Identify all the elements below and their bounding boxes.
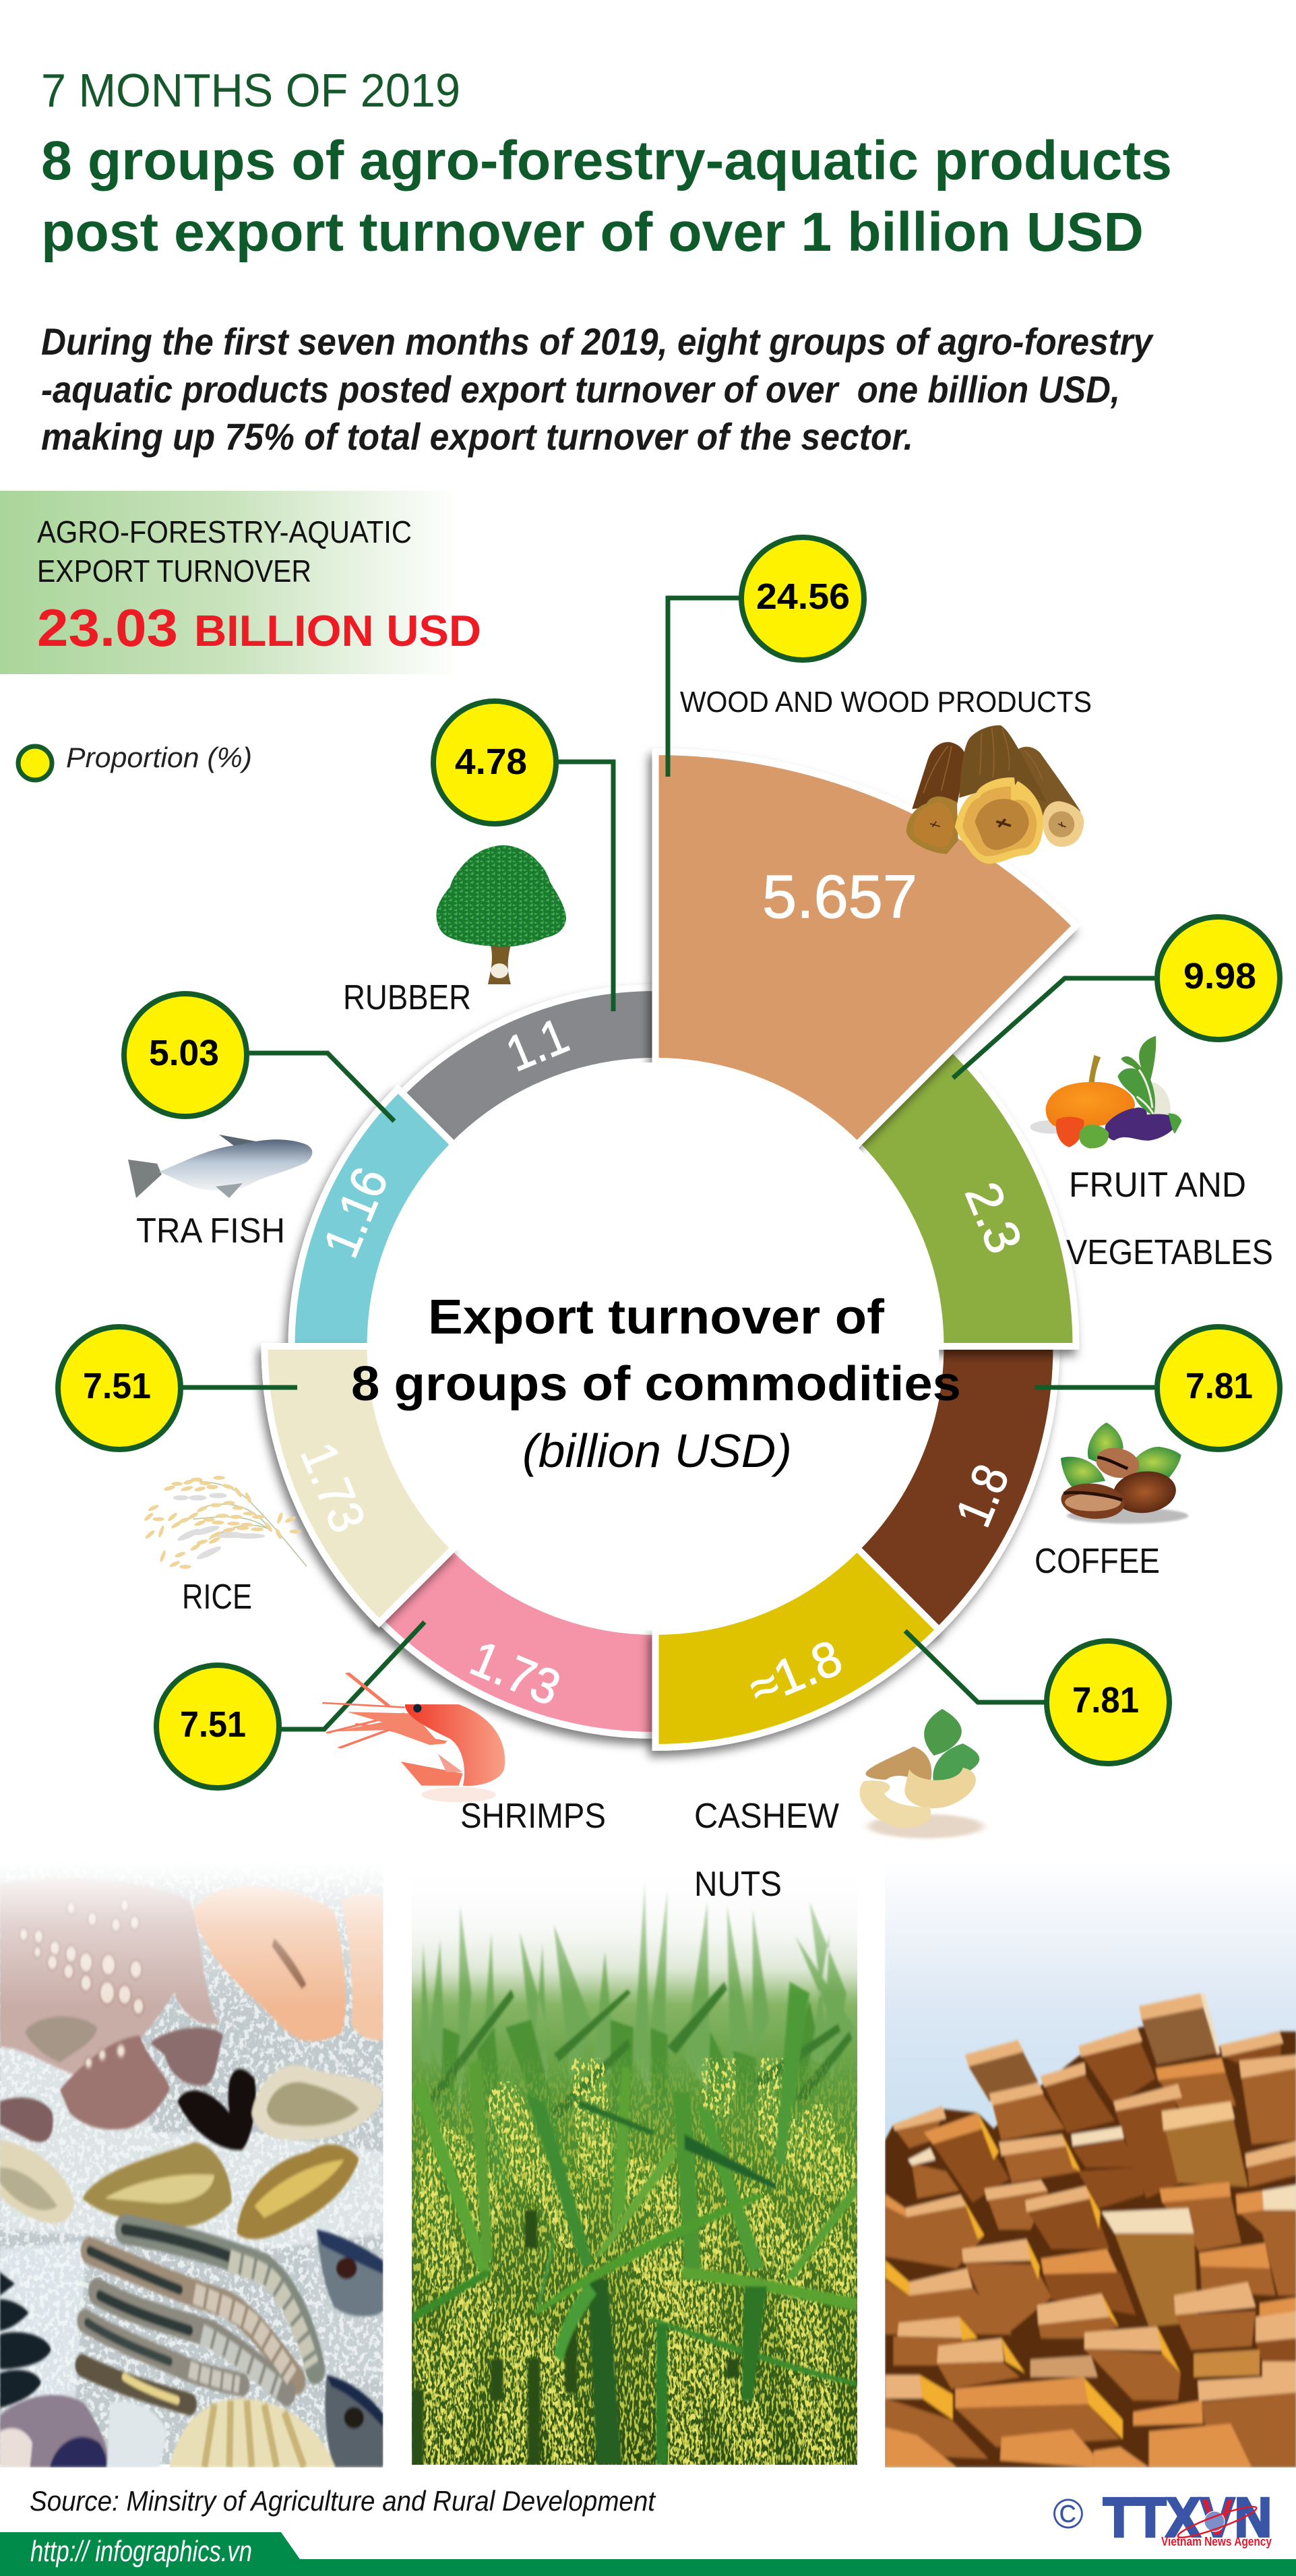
icons: shrimp and cashew (drawn in a stretched local frame) (322, 1672, 987, 1840)
callout: wood 24.56: 24.56 (756, 576, 850, 617)
title: post export turnover of over 1 billion USD (41, 202, 1144, 263)
kicker: period: 7 MONTHS OF 2019 (41, 64, 460, 117)
segment: tra fish (291, 1089, 454, 1346)
icon: rice ear (144, 1476, 307, 1569)
centre title: (billion USD) (522, 1425, 792, 1477)
footer bar with URL tab (0, 2532, 1296, 2576)
category labels: SHRIMPS (460, 1797, 606, 1836)
icon: tra fish (128, 1135, 312, 1198)
callout: fruit 9.98: 9.98 (1183, 956, 1256, 996)
intro paragraph: During the first seven months of 2019, eight groups of agro-forestry (41, 320, 1154, 363)
chart centre disc (372, 1062, 939, 1630)
category labels: VEGETABLES (1066, 1233, 1273, 1272)
category labels: WOOD AND WOOD PRODUCTS (680, 686, 1092, 719)
segment: shrimps (380, 1548, 655, 1735)
category labels (136, 686, 1273, 1904)
category labels: COFFEE (1035, 1542, 1160, 1581)
segment: wood and wood products (655, 752, 1076, 1145)
centre title: Export turnover of (428, 1290, 885, 1344)
icon: logs (906, 725, 1084, 864)
segment: fruit and vegetables (857, 1049, 1076, 1346)
value: rubber: 1.1 (499, 1007, 576, 1082)
segment: cashew nuts (655, 1548, 939, 1747)
callout: tra fish 5.03 (124, 994, 394, 1121)
value: cashew: ≈1.8 (741, 1629, 850, 1717)
photo: seafood on ice (0, 1878, 383, 2467)
callout: tra fish 5.03: 5.03 (149, 1033, 219, 1073)
callout: rubber 4.78: 4.78 (455, 742, 527, 782)
centre title: 8 groups of commodities (351, 1357, 961, 1411)
logo: TTXVN: © (1053, 2491, 1084, 2538)
value: coffee: 1.8 (945, 1457, 1020, 1534)
callout: rubber 4.78 (433, 701, 613, 1011)
photo: rice field (412, 1886, 857, 2465)
panel: total export turnover banner: BILLION USD (194, 606, 481, 655)
callout: rice 7.51: 7.51 (83, 1366, 151, 1406)
callout: cashew 7.81 (905, 1631, 1169, 1764)
category labels: TRA FISH (136, 1211, 285, 1251)
icon: cashew nuts (859, 1709, 983, 1838)
icon: coffee beans (1061, 1422, 1189, 1525)
title (41, 130, 1172, 263)
value: tra fish: 1.16 (312, 1160, 399, 1265)
radial chart: export turnover by group (264, 752, 1076, 1747)
panel: total export turnover banner: AGRO-FORESTRY-AQUATIC (37, 514, 412, 549)
callout: shrimps 7.51 (156, 1622, 425, 1788)
logo: TTXVN: Vietnam News Agency (1161, 2535, 1272, 2548)
panel: total export turnover banner (0, 491, 481, 674)
category labels: FRUIT AND (1069, 1166, 1246, 1205)
legend: proportion (18, 742, 252, 780)
footer bar with URL tab: http:// infographics.vn (30, 2535, 252, 2568)
segment: coffee (857, 1346, 1057, 1630)
segment: rubber (402, 988, 655, 1145)
callout: rice 7.51 (58, 1327, 297, 1449)
callout: shrimps 7.51: 7.51 (180, 1704, 246, 1745)
source note: Source: Minsitry of Agriculture and Rural Development (30, 2485, 656, 2517)
ring values (290, 864, 1033, 1717)
callout: cashew 7.81: 7.81 (1072, 1680, 1139, 1720)
callout: coffee 7.81: 7.81 (1185, 1366, 1253, 1406)
category labels: NUTS (694, 1865, 782, 1904)
intro paragraph: -aquatic products posted export turnover of over one billion USD, (41, 368, 1120, 411)
category labels: CASHEW (694, 1797, 839, 1836)
value: wood: 5.657 (762, 864, 917, 931)
category labels: RUBBER (343, 978, 471, 1017)
category labels: RICE (182, 1578, 252, 1617)
callout: wood 24.56 (668, 537, 864, 777)
panel: total export turnover banner: EXPORT TURNOVER (37, 553, 311, 589)
value: rice: 1.73 (290, 1435, 377, 1540)
photo: stacked timber (885, 1896, 1296, 2467)
icon: vegetables (1030, 1036, 1182, 1149)
intro paragraph: making up 75% of total export turnover of the sector. (41, 415, 913, 458)
icon: rubber tree (437, 845, 566, 984)
callout: fruit 9.98 (953, 917, 1280, 1078)
panel: total export turnover banner: 23.03 (37, 598, 178, 657)
segment: rice (264, 1346, 454, 1623)
icon: shrimp (322, 1673, 505, 1802)
legend: proportion: Proportion (%) (66, 742, 252, 773)
value: shrimps: 1.73 (463, 1629, 568, 1716)
callout: coffee 7.81 (1035, 1327, 1280, 1449)
title: 8 groups of agro-forestry-aquatic products (41, 130, 1172, 191)
value: fruit and vegetables: 2.3 (954, 1174, 1033, 1261)
logo: TTXVN: TTXVN (1103, 2487, 1272, 2548)
intro paragraph (41, 320, 1154, 458)
heading block (41, 64, 1172, 263)
centre title (351, 1290, 961, 1477)
